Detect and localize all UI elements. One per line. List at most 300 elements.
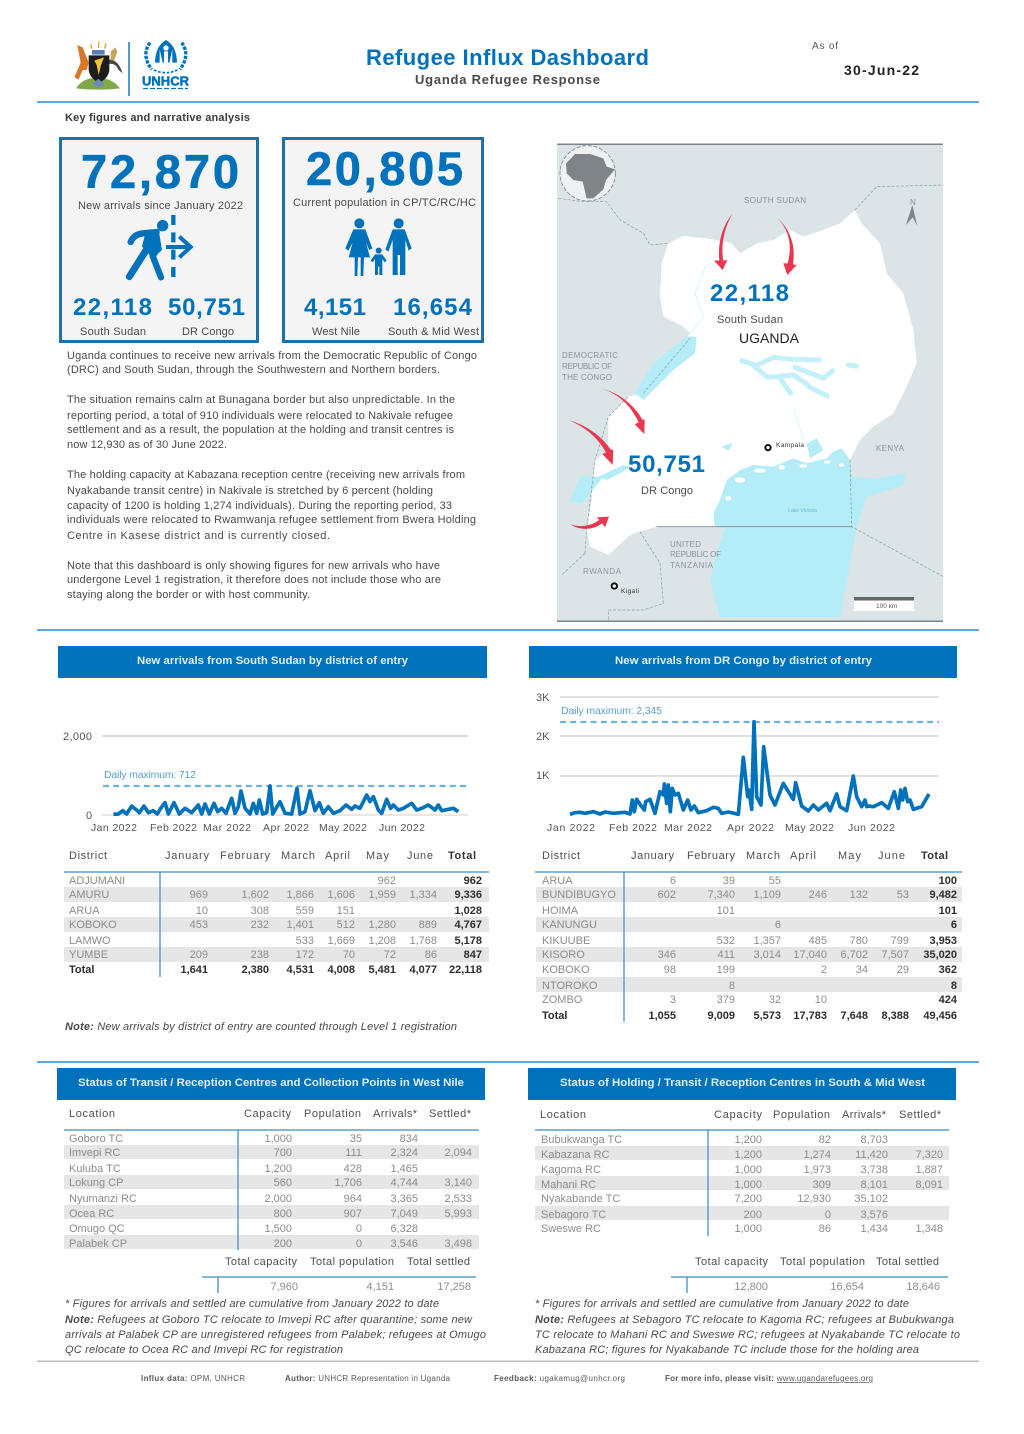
table: South Sudan arrivals by district: 1,208	[368, 935, 396, 947]
totals: West Nile: Total population	[310, 1256, 394, 1268]
table: South and Mid West centres: 11,420	[855, 1149, 888, 1161]
icon: north arrow	[906, 205, 917, 226]
narrative text: now 12,930 as of 30 June 2022.	[67, 439, 227, 451]
table: DR Congo arrivals by district: 8	[951, 980, 957, 992]
table: DR Congo arrivals by district: 379	[717, 994, 735, 1006]
footer credits: For more info, please visit: www.ugandarefugees.org	[665, 1374, 873, 1383]
table: South and Mid West centres: 3,738	[860, 1164, 888, 1176]
table: South Sudan arrivals by district: 22,118	[449, 964, 482, 976]
table: DR Congo arrivals by district: 17,040	[793, 949, 827, 961]
table: South Sudan arrivals by district: 86	[425, 949, 437, 961]
map labels: Lake Victoria	[788, 508, 818, 514]
table: West Nile centres: 0	[356, 1238, 362, 1250]
narrative text: reporting period, a total of 910 individuals were relocated to Nakivale refugee	[67, 410, 453, 422]
table: West Nile centres: 1,706	[334, 1177, 362, 1189]
table: South and Mid West centres: 8,101	[860, 1179, 888, 1191]
table: South and Mid West centres: 7,200	[734, 1193, 762, 1205]
table: DR Congo arrivals by district: April	[790, 850, 816, 862]
line chart: South Sudan daily arrivals: Mar 2022	[203, 822, 251, 834]
table: DR Congo arrivals by district: 100	[939, 875, 957, 887]
totals: South and Mid West: 12,800	[734, 1281, 768, 1293]
table: DR Congo arrivals by district: NTOROKO	[542, 980, 598, 992]
table: DR Congo arrivals by district: 49,456	[923, 1010, 957, 1022]
totals: West Nile: 4,151	[366, 1281, 394, 1293]
line chart: South Sudan daily arrivals: Feb 2022	[150, 822, 197, 834]
table: DR Congo arrivals by district: 101	[717, 905, 735, 917]
line chart: DR Congo daily arrivals: 1K	[536, 770, 550, 782]
table: South Sudan arrivals by district: 847	[464, 949, 482, 961]
table: West Nile centres: Lokung CP	[69, 1177, 123, 1189]
table: DR Congo arrivals by district: 17,783	[793, 1010, 827, 1022]
table: West Nile centres: Location	[69, 1108, 115, 1120]
table: DR Congo arrivals by district: HOIMA	[542, 905, 579, 917]
totals: South and Mid West: Total settled	[876, 1256, 939, 1268]
report date: 30-Jun-22	[844, 62, 919, 78]
panel: new arrivals: New arrivals since January 2022	[78, 200, 243, 212]
narrative text: Nyakabande transit centre) in Nakivale is stretched by 6 percent (holding	[67, 485, 433, 497]
table: South Sudan arrivals by district: March	[281, 850, 315, 862]
table: South Sudan arrivals by district: 4,767	[454, 919, 482, 931]
table: DR Congo arrivals by district: 32	[769, 994, 781, 1006]
table: West Nile centres: 800	[274, 1208, 292, 1220]
table: DR Congo arrivals by district: February	[687, 850, 736, 862]
heading band	[57, 1068, 485, 1100]
footer credits: Influx data: OPM, UNHCR	[141, 1374, 245, 1383]
map labels: SOUTH SUDAN	[744, 196, 806, 205]
markers: capital cities	[612, 445, 771, 589]
section heading: Key figures and narrative analysis	[65, 112, 250, 124]
table: South and Mid West centres: 35,102	[854, 1193, 888, 1205]
table: South Sudan arrivals by district: 533	[296, 935, 314, 947]
table: West Nile centres: 3,365	[390, 1193, 418, 1205]
heading band: Status of Holding / Transit / Reception Centres in South & Mid West	[560, 1077, 925, 1089]
table: DR Congo arrivals by district: 8,388	[881, 1010, 909, 1022]
logos: UNHCR	[142, 74, 190, 88]
table: South Sudan arrivals by district: ARUA	[69, 905, 100, 917]
table: South and Mid West centres: 7,320	[915, 1149, 943, 1161]
heading band: New arrivals from South Sudan by district of entry	[137, 655, 409, 667]
map figures: South Sudan: 22,118	[710, 280, 789, 307]
table: South Sudan arrivals by district: 1,768	[409, 935, 437, 947]
table: DR Congo arrivals by district: 799	[891, 935, 909, 947]
table: South and Mid West centres: 12,930	[797, 1193, 831, 1205]
icon: globe locator	[560, 146, 615, 201]
table: South and Mid West centres: 3,576	[860, 1209, 888, 1221]
table: South Sudan arrivals by district: 4,531	[286, 964, 314, 976]
table: West Nile centres: 1,000	[264, 1133, 292, 1145]
table: DR Congo arrivals by district: May	[838, 850, 862, 862]
totals: South and Mid West: Total capacity	[695, 1256, 768, 1268]
table: South and Mid West centres: Kagoma RC	[541, 1164, 601, 1176]
line chart: DR Congo daily arrivals: Apr 2022	[727, 822, 774, 834]
map figures: South Sudan	[710, 280, 789, 326]
totals: West Nile: Total capacity	[225, 1256, 298, 1268]
table: South Sudan arrivals by district: 453	[190, 919, 208, 931]
footnotes: South and Mid West	[535, 1298, 960, 1356]
table: West Nile centres: 1,465	[390, 1163, 418, 1175]
map labels: THE CONGO	[562, 373, 612, 382]
table: South Sudan arrivals by district: 1,959	[368, 889, 396, 901]
table: South and Mid West centres: 1,434	[860, 1223, 888, 1235]
red arrows: entry from South Sudan and DRC	[568, 213, 797, 529]
table: South and Mid West centres	[535, 1109, 949, 1236]
heading band: New arrivals from DR Congo by district of entry	[615, 655, 873, 667]
table: South Sudan arrivals by district: AMURU	[69, 889, 109, 901]
map labels: KENYA	[876, 444, 905, 453]
table: DR Congo arrivals by district: 424	[939, 994, 958, 1006]
table: South and Mid West centres: Bubukwanga TC	[541, 1134, 622, 1146]
panel: South and Mid West centres	[528, 1068, 960, 1356]
table: South Sudan arrivals by district: 172	[296, 949, 314, 961]
table: DR Congo arrivals by district: 7,507	[881, 949, 909, 961]
table: West Nile centres: 2,094	[444, 1147, 472, 1159]
table: West Nile centres: 560	[274, 1177, 292, 1189]
table: South and Mid West centres: Location	[540, 1109, 586, 1121]
table: DR Congo arrivals by district: 101	[939, 905, 957, 917]
panel: current population: 20,805	[306, 142, 463, 195]
table: DR Congo arrivals by district: 7,340	[707, 889, 735, 901]
table: DR Congo arrivals by district: 34	[856, 964, 868, 976]
line chart: South Sudan daily arrivals: Jan 2022	[91, 822, 137, 834]
map labels: REPUBLIC OF	[670, 550, 721, 559]
narrative text: settlement and as a result, the population at the holding and transit centres is	[67, 424, 454, 436]
table: West Nile centres: Omugo QC	[69, 1223, 125, 1235]
table: South and Mid West centres: 8,703	[860, 1134, 888, 1146]
table: DR Congo arrivals by district: KISORO	[542, 949, 585, 961]
table: South Sudan arrivals by district: 209	[190, 949, 208, 961]
heading band	[528, 1068, 956, 1100]
line chart: South Sudan daily arrivals: Daily maximum: 712	[104, 769, 196, 781]
table: South and Mid West centres: 200	[744, 1209, 762, 1221]
table: DR Congo arrivals by district: 780	[850, 935, 868, 947]
map labels: Kigali	[621, 588, 639, 595]
panel: current population	[284, 138, 482, 342]
table: South and Mid West centres: Capacity	[714, 1109, 762, 1121]
subtitle: Uganda Refugee Response	[415, 72, 600, 87]
table: DR Congo arrivals by district: ZOMBO	[542, 994, 583, 1006]
table: West Nile centres: 7,049	[390, 1208, 418, 1220]
table: West Nile centres: 3,498	[444, 1238, 472, 1250]
report date	[812, 41, 919, 78]
table: South Sudan arrivals by district: YUMBE	[69, 949, 108, 961]
line chart: DR Congo daily arrivals: Feb 2022	[609, 822, 657, 834]
heading band	[529, 646, 957, 678]
narrative text: individuals were relocated to Rwamwanja refugee settlement from Bwera Holding	[67, 514, 476, 526]
table: DR Congo arrivals by district: 199	[717, 964, 735, 976]
table: DR Congo arrivals by district: 1,357	[753, 935, 781, 947]
table: South and Mid West centres: 8,091	[915, 1179, 943, 1191]
table: West Nile centres: Population	[304, 1108, 361, 1120]
table: South and Mid West centres: 1,274	[803, 1149, 831, 1161]
footnotes: South and Mid West: * Figures for arrivals and settled are cumulative from January 2022 to date	[535, 1298, 909, 1310]
logos	[74, 40, 190, 96]
line chart: DR Congo daily arrivals: 3K	[536, 692, 550, 704]
icon: UNHCR logo	[146, 40, 186, 73]
table: West Nile centres: 3,546	[390, 1238, 418, 1250]
table: DR Congo arrivals by district: 9,009	[707, 1010, 735, 1022]
table: South and Mid West centres: 1,887	[915, 1164, 943, 1176]
footnotes: South and Mid West: Kabazana RC; figures for Nyakabande TC include those for the holding area	[535, 1344, 919, 1356]
line chart: DR Congo daily arrivals	[536, 692, 939, 834]
table: South and Mid West centres: Mahani RC	[541, 1179, 596, 1191]
table: West Nile centres: Capacity	[244, 1108, 292, 1120]
table: South Sudan arrivals by district: ADJUMANI	[69, 875, 125, 887]
narrative text: capacity of 1200 is holding 1,274 individuals). During the reporting period, 33	[67, 500, 452, 512]
table: South Sudan arrivals by district: 308	[251, 905, 269, 917]
panel: new arrivals	[60, 138, 258, 342]
table: South and Mid West centres: 1,348	[915, 1223, 943, 1235]
table: South and Mid West centres: 1,200	[734, 1149, 762, 1161]
narrative text: (DRC) and South Sudan, through the Southwestern and Northern borders.	[67, 364, 440, 376]
panel: current population: West Nile	[312, 326, 360, 338]
table: South Sudan arrivals by district: June	[407, 850, 433, 862]
table: DR Congo arrivals by district: 1,109	[753, 889, 781, 901]
table: South and Mid West centres: Nyakabande TC	[541, 1193, 620, 1205]
table: South Sudan arrivals by district: 1,028	[454, 905, 482, 917]
table: South Sudan arrivals by district: 232	[251, 919, 269, 931]
table: West Nile centres	[64, 1108, 479, 1250]
footnotes: South and Mid West: Note: Refugees at Sebagoro TC relocate to Kagoma RC; refugees at Bubukwanga	[535, 1314, 954, 1326]
totals: West Nile	[202, 1256, 476, 1293]
footnotes: West Nile: Note: Refugees at Goboro TC relocate to Imvepi RC after quarantine; some new	[65, 1314, 473, 1326]
line chart: South Sudan daily arrivals: 0	[86, 810, 92, 822]
narrative text: The situation remains calm at Bunagana border but also unpredictable. In the	[67, 394, 455, 406]
map labels: RWANDA	[583, 567, 622, 576]
table note: Note: New arrivals by district of entry are counted through Level 1 registration	[65, 1021, 457, 1033]
table: South Sudan arrivals by district: February	[220, 850, 270, 862]
table: South Sudan arrivals by district: District	[69, 850, 107, 862]
totals: South and Mid West	[671, 1256, 948, 1293]
table: West Nile centres: 964	[344, 1193, 362, 1205]
narrative text: The holding capacity at Kabazana reception centre (receiving new arrivals from	[67, 469, 465, 481]
map labels: N	[910, 198, 916, 207]
footnotes: West Nile: * Figures for arrivals and settled are cumulative from January 2022 to date	[65, 1298, 439, 1310]
line chart: DR Congo daily arrivals: Daily maximum: 2,345	[561, 705, 662, 717]
footnotes: West Nile: QC relocate to Ocea RC and Imvepi RC for registration	[65, 1344, 343, 1356]
table: South and Mid West centres: 82	[819, 1134, 831, 1146]
map scale bar	[854, 597, 914, 611]
table: DR Congo arrivals by district: 362	[939, 964, 957, 976]
footer credits: Feedback: ugakamug@unhcr.org	[494, 1374, 625, 1383]
icon: person crossing border	[129, 215, 191, 278]
table: South Sudan arrivals by district: Total	[69, 964, 94, 976]
table: South Sudan arrivals by district: 962	[464, 875, 482, 887]
footnotes: South and Mid West: TC relocate to Mahani RC and Sweswe RC; refugees at Nyakabande TC relocate to	[535, 1329, 960, 1341]
table: South Sudan arrivals by district: 1,280	[368, 919, 396, 931]
footer credits	[141, 1374, 873, 1383]
table: DR Congo arrivals by district: 6,702	[840, 949, 868, 961]
line chart: DR Congo daily arrivals: Mar 2022	[664, 822, 712, 834]
table: DR Congo arrivals by district: 53	[897, 889, 909, 901]
table: DR Congo arrivals by district: 532	[717, 935, 735, 947]
table: DR Congo arrivals by district: 8	[729, 980, 735, 992]
map figures: South Sudan: South Sudan	[717, 314, 783, 326]
panel: DR Congo arrivals	[529, 646, 962, 1022]
narrative text: staying along the border or with host community.	[67, 589, 310, 601]
table: West Nile centres: 35	[350, 1133, 362, 1145]
table: West Nile centres: 2,324	[390, 1147, 418, 1159]
table: West Nile centres: Imvepi RC	[69, 1147, 120, 1159]
table: DR Congo arrivals by district: ARUA	[542, 875, 573, 887]
heading band: Status of Transit / Reception Centres and Collection Points in West Nile	[78, 1077, 464, 1089]
table: West Nile centres: 6,328	[390, 1223, 418, 1235]
table: West Nile centres: 700	[274, 1147, 292, 1159]
table: DR Congo arrivals by district: Total	[921, 850, 948, 862]
table: South Sudan arrivals by district: April	[325, 850, 350, 862]
narrative text: Centre in Kasese district and is currently closed.	[67, 530, 330, 542]
icon: Uganda coat of arms	[74, 41, 123, 90]
map	[557, 144, 943, 622]
table: South and Mid West centres: Settled*	[899, 1109, 942, 1121]
table: DR Congo arrivals by district: Total	[542, 1010, 567, 1022]
table: DR Congo arrivals by district: District	[542, 850, 580, 862]
narrative text	[67, 350, 477, 601]
table: South Sudan arrivals by district: 1,669	[327, 935, 355, 947]
divider between logos	[128, 42, 130, 96]
report date: As of	[812, 41, 838, 52]
panel: new arrivals: 72,870	[81, 145, 239, 198]
map: country shapes	[558, 146, 943, 620]
map figures: DR Congo: 50,751	[628, 451, 705, 478]
table: West Nile centres: 3,140	[444, 1177, 472, 1189]
heading band	[58, 646, 487, 678]
table: DR Congo arrivals by district: 6	[951, 919, 957, 931]
table: DR Congo arrivals by district: June	[878, 850, 905, 862]
map scale bar: 100 km	[876, 603, 897, 610]
table: DR Congo arrivals by district: 485	[809, 935, 827, 947]
panel: new arrivals: South Sudan	[80, 326, 146, 338]
line chart: South Sudan daily arrivals: 2,000	[63, 731, 92, 743]
table: DR Congo arrivals by district: 55	[769, 875, 781, 887]
table: DR Congo arrivals by district: 39	[723, 875, 735, 887]
line chart: DR Congo daily arrivals: Jun 2022	[848, 822, 895, 834]
table: West Nile centres: 907	[344, 1208, 362, 1220]
table: West Nile centres: Settled*	[429, 1108, 472, 1120]
table: South Sudan arrivals by district: January	[165, 850, 210, 862]
title	[366, 45, 649, 87]
map labels: TANZANIA	[670, 561, 714, 570]
table: West Nile centres: Goboro TC	[69, 1133, 123, 1145]
table: South Sudan arrivals by district: 1,641	[180, 964, 208, 976]
table: DR Congo arrivals by district: 6	[670, 875, 676, 887]
table: West Nile centres: 200	[274, 1238, 292, 1250]
table: West Nile centres: 111	[345, 1147, 362, 1159]
table: West Nile centres: 834	[400, 1133, 418, 1145]
table: DR Congo arrivals by district: 2	[821, 964, 827, 976]
table: South and Mid West centres: Sebagoro TC	[541, 1209, 606, 1221]
panel: West Nile centres	[57, 1068, 486, 1356]
map labels: UGANDA	[739, 330, 800, 346]
line chart: South Sudan daily arrivals: Jun 2022	[379, 822, 425, 834]
table: South Sudan arrivals by district: 889	[419, 919, 437, 931]
table: DR Congo arrivals by district: BUNDIBUGYO	[542, 889, 616, 901]
panel: new arrivals: 22,118	[73, 294, 152, 321]
map figures: DR Congo	[628, 451, 705, 497]
table: South and Mid West centres: 0	[825, 1209, 831, 1221]
map labels: UNITED	[670, 540, 701, 549]
table: South Sudan arrivals by district: KOBOKO	[69, 919, 117, 931]
table: West Nile centres: 2,533	[444, 1193, 472, 1205]
table: DR Congo arrivals by district: 10	[815, 994, 827, 1006]
table: South Sudan arrivals by district: 4,008	[327, 964, 355, 976]
totals: South and Mid West: 16,654	[830, 1281, 864, 1293]
title: Refugee Influx Dashboard	[366, 45, 649, 70]
table: West Nile centres: Palabek CP	[69, 1238, 127, 1250]
panel: current population: 4,151	[304, 294, 366, 321]
table: West Nile centres: 2,000	[264, 1193, 292, 1205]
table: South and Mid West centres: 1,200	[734, 1134, 762, 1146]
table: DR Congo arrivals by district: January	[631, 850, 674, 862]
table: South Sudan arrivals by district: 1,334	[409, 889, 437, 901]
table: South Sudan arrivals by district: May	[366, 850, 390, 862]
table: South Sudan arrivals by district	[64, 850, 489, 977]
table: South Sudan arrivals by district: Total	[448, 850, 476, 862]
footer credits: Author: UNHCR Representation in Uganda	[285, 1374, 451, 1383]
panel: new arrivals: DR Congo	[182, 326, 234, 338]
table: DR Congo arrivals by district: KIKUUBE	[542, 935, 590, 947]
table: South and Mid West centres: 1,973	[803, 1164, 831, 1176]
narrative text: undergone Level 1 registration, it therefore does not include those who are	[67, 574, 441, 586]
table: DR Congo arrivals by district: 1,055	[648, 1010, 676, 1022]
table: DR Congo arrivals by district: 7,648	[840, 1010, 868, 1022]
table: DR Congo arrivals by district: 6	[775, 919, 781, 931]
table: DR Congo arrivals by district: 29	[897, 964, 909, 976]
table: South Sudan arrivals by district: 5,178	[454, 935, 482, 947]
table: South Sudan arrivals by district: 5,481	[368, 964, 396, 976]
table: West Nile centres: Kuluba TC	[69, 1163, 121, 1175]
totals: South and Mid West: Total population	[780, 1256, 865, 1268]
line chart: DR Congo daily arrivals: Jan 2022	[547, 822, 595, 834]
table: South and Mid West centres: Arrivals*	[842, 1109, 887, 1121]
footnotes: West Nile	[65, 1298, 486, 1356]
totals: West Nile: 17,258	[437, 1281, 471, 1293]
table: South Sudan arrivals by district: 559	[296, 905, 314, 917]
map labels: Kampala	[776, 442, 804, 449]
table: South and Mid West centres: 309	[813, 1179, 831, 1191]
table: DR Congo arrivals by district: 35,020	[923, 949, 957, 961]
map labels	[562, 196, 916, 595]
table: South Sudan arrivals by district: 151	[337, 905, 355, 917]
table: West Nile centres: Arrivals*	[373, 1108, 418, 1120]
table: West Nile centres: Ocea RC	[69, 1208, 114, 1220]
panel: new arrivals: 50,751	[168, 294, 245, 321]
table: DR Congo arrivals by district: 346	[658, 949, 676, 961]
table: South Sudan arrivals by district: 4,077	[409, 964, 437, 976]
table: West Nile centres: Nyumanzi RC	[69, 1193, 137, 1205]
table: South Sudan arrivals by district: 1,602	[241, 889, 269, 901]
table: South Sudan arrivals by district: LAMWO	[69, 935, 111, 947]
map figures: DR Congo: DR Congo	[641, 485, 693, 497]
table: DR Congo arrivals by district: 9,482	[929, 889, 957, 901]
table: South Sudan arrivals by district: 10	[196, 905, 208, 917]
table: DR Congo arrivals by district: 3,014	[753, 949, 781, 961]
table: South and Mid West centres: Sweswe RC	[541, 1223, 601, 1235]
table: South Sudan arrivals by district: 969	[190, 889, 208, 901]
panel: current population: Current population in CP/TC/RC/HC	[293, 197, 476, 209]
table: DR Congo arrivals by district: 3	[670, 994, 676, 1006]
table: South and Mid West centres: Kabazana RC	[541, 1149, 610, 1161]
table: DR Congo arrivals by district: KOBOKO	[542, 964, 590, 976]
table: South Sudan arrivals by district: 9,336	[454, 889, 482, 901]
map labels: DEMOCRATIC	[562, 351, 618, 360]
totals: West Nile: 7,960	[270, 1281, 298, 1293]
table: West Nile centres: 0	[356, 1223, 362, 1235]
table: DR Congo arrivals by district: 132	[850, 889, 868, 901]
table: South and Mid West centres: 1,000	[734, 1179, 762, 1191]
narrative text: Uganda continues to receive new arrivals from the Democratic Republic of Congo	[67, 350, 477, 362]
panel: current population: 16,654	[393, 294, 473, 321]
table: West Nile centres: 1,200	[264, 1163, 292, 1175]
